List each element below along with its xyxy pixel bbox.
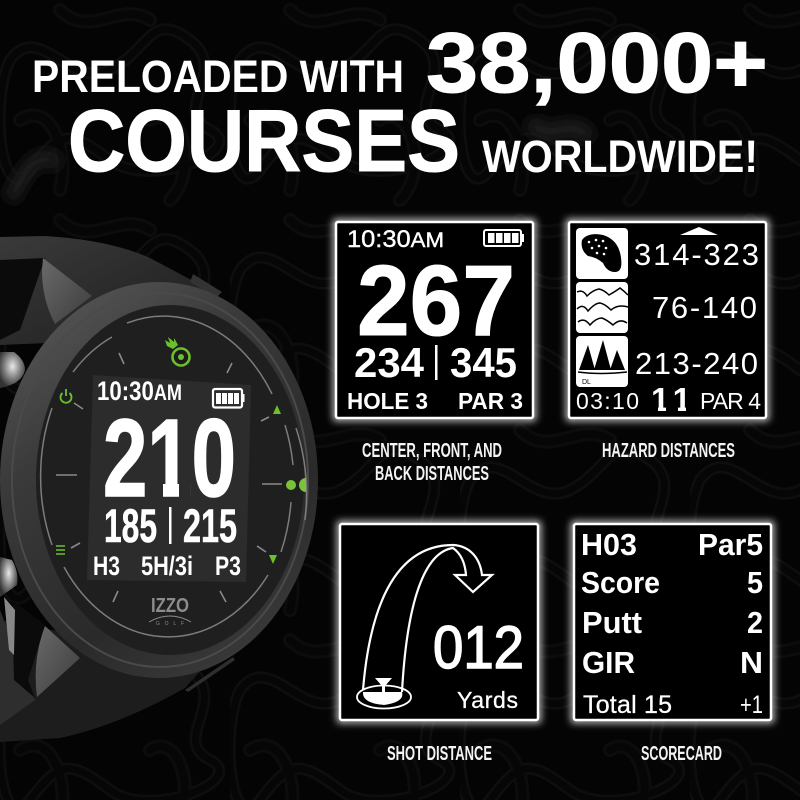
lug top xyxy=(42,258,92,324)
watch hole, club and par xyxy=(93,551,241,581)
icon: battery xyxy=(484,230,524,246)
hazard footer row: PAR 4 xyxy=(700,388,761,414)
yards label: Yards xyxy=(457,687,518,713)
row: putt xyxy=(582,605,763,640)
caption: hazard distances: HAZARD DISTANCES xyxy=(602,440,735,462)
brand logo: IZZO xyxy=(151,595,189,617)
title line: preloaded with: PRELOADED WITH xyxy=(32,51,404,102)
row: green in regulation: GIR xyxy=(582,645,635,680)
title line: courses: COURSES xyxy=(68,91,460,190)
hazard footer row: 11 xyxy=(651,381,691,418)
inner rings xyxy=(41,316,306,637)
icon: green dots xyxy=(286,478,306,492)
watch strap bottom xyxy=(0,620,210,742)
panel: hazard distances xyxy=(569,222,766,418)
hazard distance: bunker: 314-323 xyxy=(634,237,759,272)
icon: trees: DL xyxy=(582,379,591,386)
icon: trees xyxy=(576,336,628,387)
caption: scorecard: SCORECARD xyxy=(641,743,722,765)
icon: tee and ball mark xyxy=(357,678,411,708)
row: score xyxy=(581,565,763,600)
icon: water xyxy=(576,282,628,333)
hazard footer row xyxy=(576,381,761,418)
hole and par xyxy=(347,388,523,414)
hour ticks xyxy=(56,353,282,602)
icon: menu xyxy=(56,546,65,554)
panel: shot distance xyxy=(340,524,538,720)
lug bottom xyxy=(36,626,80,697)
shot distance value: 012 xyxy=(433,614,524,681)
watch screen time: 10:30AM xyxy=(97,376,182,406)
front and back distances xyxy=(354,339,517,386)
panel: scorecard xyxy=(574,524,771,720)
watch front and back distances xyxy=(104,499,237,552)
title number: 38,000+: 38,000+ xyxy=(426,16,768,111)
icon: up arrow xyxy=(680,227,718,235)
row: hole and par: Par5 xyxy=(698,527,763,562)
row: green in regulation: N xyxy=(740,645,763,680)
panel: center, front and back distances xyxy=(336,222,533,418)
title xyxy=(32,16,768,190)
hole and par: PAR 3 xyxy=(458,388,523,414)
watch main distance: 210 xyxy=(103,397,236,520)
icon: up arrow xyxy=(273,405,281,414)
watch face xyxy=(36,305,304,655)
bezel xyxy=(0,282,318,678)
title line: worldwide: WORLDWIDE! xyxy=(482,131,758,182)
side buttons xyxy=(0,352,25,655)
row: total: Total 15 xyxy=(583,691,672,719)
hazard distance: trees: 213-240 xyxy=(635,346,758,381)
row: total xyxy=(583,691,763,719)
front and back distances: 345 xyxy=(450,339,517,386)
brand logo: GOLF xyxy=(156,621,184,627)
hole and par: HOLE 3 xyxy=(347,388,428,414)
row: putt: Putt xyxy=(582,605,642,640)
row: score: 5 xyxy=(747,565,763,600)
center distance: 267 xyxy=(357,245,515,357)
caption: center, front and back distances xyxy=(362,440,502,485)
watch front and back distances: 185 xyxy=(104,499,157,552)
hazard distance: water: 76-140 xyxy=(652,290,757,325)
icon: down arrow xyxy=(269,555,277,564)
icon: green flame logo xyxy=(165,337,190,366)
row: score: Score xyxy=(581,565,660,600)
time: 10:30AM xyxy=(347,226,444,253)
row: hole and par: H03 xyxy=(581,527,637,562)
icon: bunker xyxy=(576,228,628,279)
row: green in regulation xyxy=(582,645,763,680)
watch hole, club and par: H3 xyxy=(93,551,120,581)
row: total: +1 xyxy=(740,691,763,719)
watch hole, club and par: 5H/3i xyxy=(141,551,193,581)
front and back distances: 234 xyxy=(354,339,425,386)
smartwatch illustration xyxy=(0,236,318,742)
icon: battery xyxy=(213,389,244,408)
caption: center, front and back distances: BACK DISTANCES xyxy=(375,463,489,485)
row: hole and par xyxy=(581,527,763,562)
caption: shot distance: SHOT DISTANCE xyxy=(387,743,492,765)
watch screen xyxy=(87,375,251,582)
row: putt: 2 xyxy=(747,605,763,640)
caption: center, front and back distances: CENTER, FRONT, AND xyxy=(362,440,502,462)
watch front and back distances: 215 xyxy=(183,499,237,552)
hazard footer row: 03:10 xyxy=(576,388,639,414)
icon: shot arc arrow xyxy=(363,545,492,692)
strap inner shadows xyxy=(0,258,45,698)
watch strap top xyxy=(0,236,215,345)
brand logo xyxy=(149,595,191,627)
watch hole, club and par: P3 xyxy=(215,551,241,581)
icon: power xyxy=(60,389,72,403)
